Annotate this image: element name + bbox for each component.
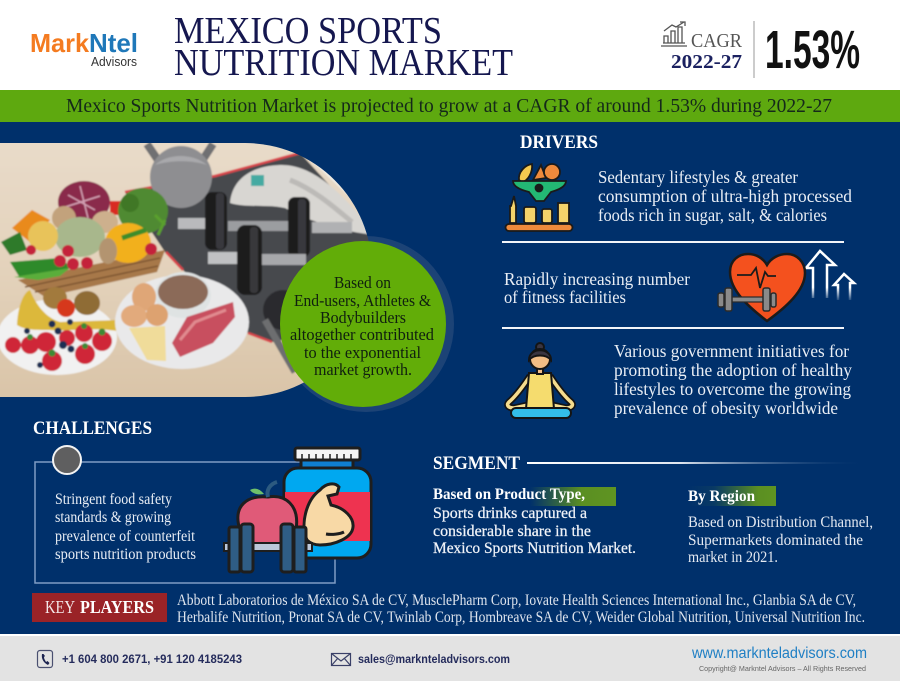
circle ring behind callout <box>278 236 454 412</box>
segment: product type: Sports drinks captured a <box>433 505 587 522</box>
icon: supplement jar, apple and dumbbell <box>224 448 371 572</box>
logo: MarkNtel Advisors <box>30 28 138 69</box>
challenge text: sports nutrition products <box>55 546 196 563</box>
title <box>174 10 513 84</box>
segment: by region: market in 2021. <box>688 549 778 566</box>
icon: food processing <box>506 164 572 231</box>
driver text 2: of fitness facilities <box>504 287 626 307</box>
driver text 1: consumption of ultra-high processed <box>598 186 852 206</box>
key players label <box>32 593 167 622</box>
challenge text: standards & growing <box>55 509 171 526</box>
email: sales@marknteladvisors.com <box>358 654 510 666</box>
driver text 2 <box>504 269 690 307</box>
challenge text <box>55 491 196 563</box>
segment: product type: Mexico Sports Nutrition Market. <box>433 540 636 557</box>
green banner <box>0 90 900 122</box>
driver text 3: Various government initiatives for <box>614 341 849 361</box>
challenge text: Stringent food safety <box>55 491 172 508</box>
driver text 3: promoting the adoption of healthy <box>614 360 852 380</box>
callout: end-users circle: End-users, Athletes & <box>294 291 431 310</box>
callout: end-users circle: Bodybuilders <box>320 308 406 327</box>
kettlebell <box>147 144 213 208</box>
callout: end-users circle: altogether contributed <box>290 325 435 344</box>
logo: MarkNtel Advisors: Advisors <box>91 55 137 69</box>
segment: product type: Based on Product Type, <box>433 486 585 503</box>
icon: growth bar chart <box>661 22 687 46</box>
copyright: Copyright@ Markntel Advisors – All Rights Reserved <box>699 664 866 673</box>
challenges panel outline <box>35 462 335 583</box>
callout: end-users circle: to the exponential <box>304 343 421 362</box>
challenge bullet <box>53 446 81 474</box>
challenge text: prevalence of counterfeit <box>55 528 196 545</box>
dumbbells <box>178 192 352 372</box>
CAGR label: 2022-27 <box>671 51 742 73</box>
icon: phone <box>38 650 52 668</box>
segment: by region <box>688 486 873 566</box>
segment: by region: Supermarkets dominated the <box>688 532 863 549</box>
segment: by region: Based on Distribution Channel, <box>688 514 873 531</box>
driver text 3 <box>614 341 852 418</box>
callout: end-users circle: market growth. <box>314 360 412 379</box>
phone numbers: +1 604 800 2671, +91 120 4185243 <box>62 654 242 666</box>
logo: MarkNtel Advisors: Ntel <box>89 28 138 58</box>
callout: end-users circle <box>280 241 446 407</box>
segment: product type <box>433 486 636 557</box>
key players list <box>177 592 865 626</box>
heading: drivers: DRIVERS <box>520 132 598 153</box>
driver text 2: Rapidly increasing number <box>504 269 690 289</box>
green banner: Mexico Sports Nutrition Market is projected to grow at a CAGR of around 1.53% during 2022-27 <box>66 95 832 117</box>
CAGR label: CAGR <box>691 30 743 52</box>
icon: heart, dumbbell and rising arrows <box>718 251 854 321</box>
exercise mat <box>125 153 375 342</box>
towel <box>230 165 375 235</box>
driver text 1: foods rich in sugar, salt, & calories <box>598 205 827 225</box>
heading: segment: SEGMENT <box>433 453 520 474</box>
heading: challenges: CHALLENGES <box>33 418 152 439</box>
segment: product type: considerable share in the <box>433 523 591 540</box>
header band <box>0 0 900 90</box>
basket of vegetables <box>1 181 168 297</box>
protein plate <box>115 272 249 369</box>
photo: healthy food and dumbbells <box>0 143 368 397</box>
driver text 3: lifestyles to overcome the growing <box>614 379 851 399</box>
driver text 3: prevalence of obesity worldwide <box>614 398 838 418</box>
title: MEXICO SPORTS <box>174 10 442 52</box>
icon: mail <box>332 654 350 666</box>
fruit bowl <box>0 287 122 375</box>
driver text 1 <box>598 167 852 225</box>
key players label: KEY <box>45 597 75 617</box>
icon: meditating figure <box>508 343 572 418</box>
driver text 1: Sedentary lifestyles & greater <box>598 167 798 187</box>
segment: by region: By Region <box>688 488 755 505</box>
title: NUTRITION MARKET <box>174 42 513 84</box>
CAGR label <box>671 30 743 73</box>
website: www.marknteladvisors.com <box>691 645 867 662</box>
footer <box>0 634 900 683</box>
callout: end-users circle: Based on <box>334 273 391 292</box>
logo: MarkNtel Advisors: Mark <box>30 28 90 58</box>
key players label: PLAYERS <box>80 597 154 617</box>
